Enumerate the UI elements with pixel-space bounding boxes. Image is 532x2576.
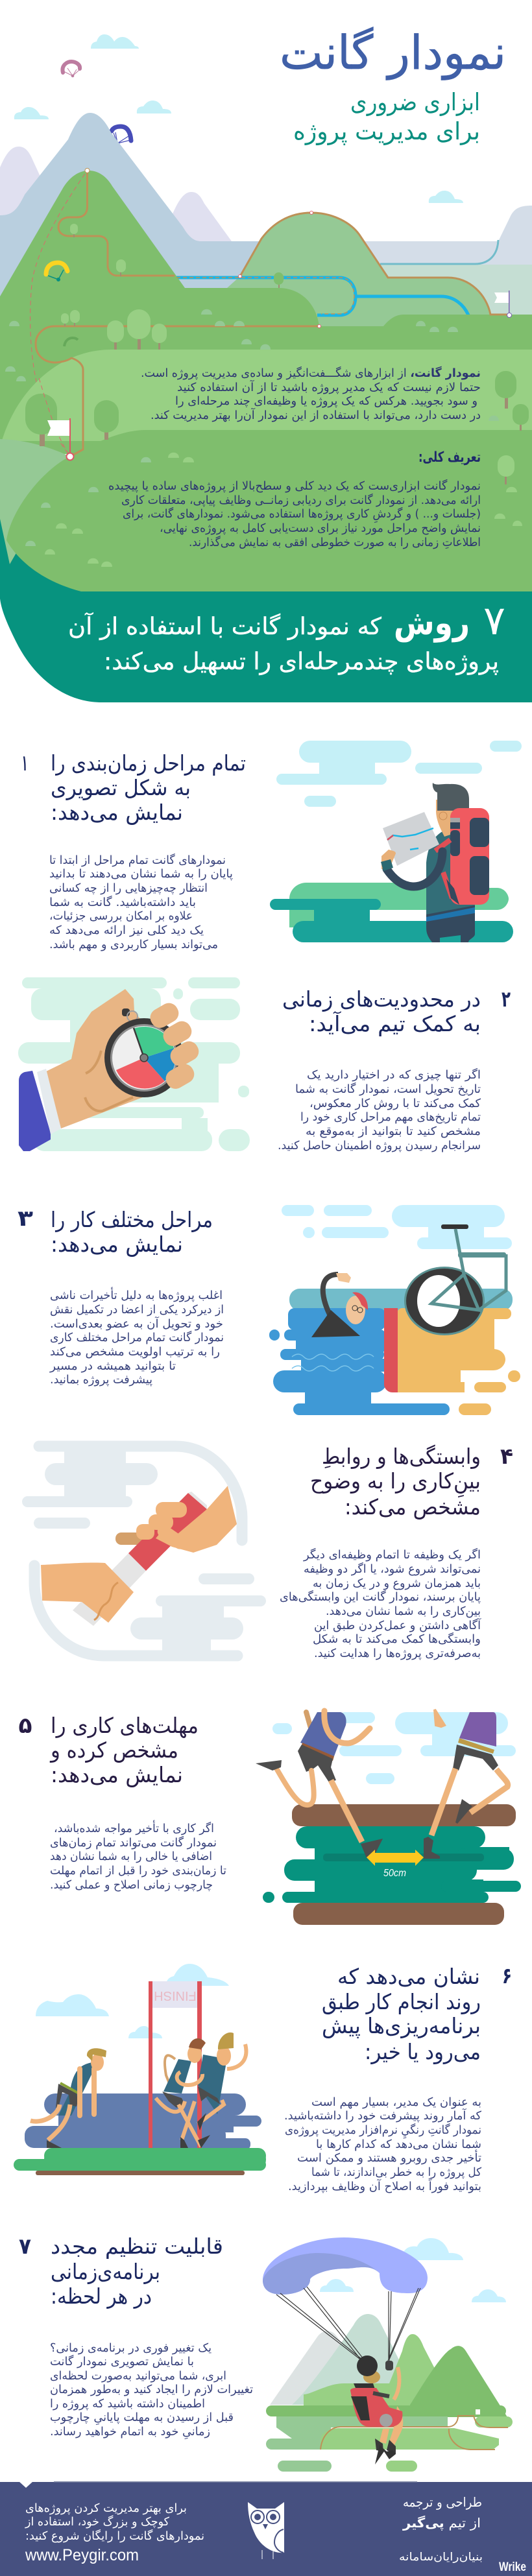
section 4 heading: بینِ‌کاری را به وضوح xyxy=(310,1468,481,1498)
section 1 body: می‌تواند بسیار کاربردی و مهم باشد. xyxy=(49,938,218,951)
icon: parachute yellow xyxy=(46,263,67,281)
runner tired xyxy=(30,2048,106,2148)
runners at finish xyxy=(156,2033,246,2148)
section 3 body: نمودار گانت تمام مراحل مختلف کاری xyxy=(50,1330,224,1344)
subtitle: ابزاری ضروری xyxy=(350,88,480,116)
hero landscape illustration xyxy=(0,34,532,454)
section 1 illustration: man with map xyxy=(270,741,522,942)
call to action text: نمودارهای گانت را رایگان شروع کنید: xyxy=(25,2529,204,2543)
section 2 body: سرانجام رسیدن پروژه اطمینان حاصل کنید. xyxy=(278,1139,481,1152)
section 2 body: اگر تنها چیزی که در اختیار دارید یک xyxy=(307,1067,481,1082)
section 4 body: آگاهی داشتن و عمل‌کردن طبق این xyxy=(314,1617,481,1632)
text block: definition: اطلاعاتِ زمانی را به صورت خطوطی افقی به نمایش می‌گذارند. xyxy=(189,535,481,549)
section 6 heading: روند انجام کار طبق xyxy=(322,1989,481,2015)
section 5 body xyxy=(50,1820,226,1892)
title: نمودار گانت xyxy=(280,25,506,80)
section 7 body: قبل از رسیدن به مهلت پایانیِ چارچوب xyxy=(50,2411,234,2426)
panel: light green intro xyxy=(0,350,532,447)
icon: crescent green xyxy=(64,338,78,346)
clouds xyxy=(276,741,522,807)
small mounds upper xyxy=(5,309,458,387)
text block: definition: ارائه می‌دهد. از نمودار گانت برای ردیابی زمانــی وظایف پیاپی، متعلقات کاری xyxy=(121,493,481,507)
runner blue xyxy=(256,1711,383,1858)
lower hand xyxy=(41,1562,134,1623)
section 6 number: ۶ xyxy=(502,1963,512,1989)
finish gate: FINISH xyxy=(154,1988,197,2003)
section 6 heading: نشان می‌دهد که xyxy=(337,1964,480,1989)
credit text: بنیان‌رایان‌سامانه xyxy=(399,2551,483,2564)
section 2 heading: به کمک تیم می‌آید: xyxy=(309,1011,481,1036)
section 6 body: شما نشان می‌دهد که کدام کارها با xyxy=(316,2138,481,2151)
call to action text xyxy=(25,2501,204,2564)
icon: parachute blue xyxy=(112,126,131,146)
section 1 heading: نمایش می‌دهد: xyxy=(51,800,183,825)
mountains xyxy=(266,2314,513,2472)
ground xyxy=(14,2093,266,2175)
section 6 body: نمودار گانتِ رنگيِ نرم‌افزار مدیریت پروژه‌ی xyxy=(285,2123,481,2139)
footer panel xyxy=(0,2481,532,2576)
heading: seven ways: که نمودار گانت با استفاده از آن xyxy=(68,612,382,640)
section 4 number: ۴ xyxy=(500,1444,513,1470)
icon: parachute pink xyxy=(62,62,80,77)
baton xyxy=(73,1553,146,1626)
section 6 body: کل پروژه را به خطر بی‌اندازند، تا شما xyxy=(311,2165,481,2179)
heading: seven ways xyxy=(68,597,505,675)
section 1 heading: به شکل تصویری xyxy=(51,775,191,800)
text block: intro xyxy=(141,366,481,422)
track xyxy=(263,1804,521,1925)
section 4 body xyxy=(280,1547,481,1660)
section 1 heading xyxy=(51,750,246,825)
sleeve xyxy=(19,1071,51,1151)
credit text: طراحی و ترجمه xyxy=(403,2494,482,2510)
big green mountain xyxy=(0,171,532,454)
section 2 body: کمک می‌کند تا با روش کار معکوس، xyxy=(309,1097,481,1110)
section 2 body: مشخص کنید تا بتوانید از به‌موقع به xyxy=(306,1125,481,1138)
person xyxy=(381,783,489,942)
section 1 body: نمودارهای گانت تمام مراحل از ابتدا تا xyxy=(49,853,226,867)
section 5 number: ۵ xyxy=(18,1713,32,1739)
section 7 heading: برنامه‌ی‌زمانی xyxy=(51,2259,160,2284)
credit text: از تیم پی‌گیر xyxy=(402,2515,481,2531)
panel: definition green xyxy=(6,430,532,591)
section 6 heading xyxy=(322,1964,481,2064)
section 3 heading: نمایش می‌دهد: xyxy=(51,1232,183,1257)
runner purple xyxy=(424,1710,508,1859)
section 5 heading: مهلت‌های کاری را xyxy=(51,1713,199,1738)
clouds xyxy=(320,2238,506,2302)
yellow arrow 50cm xyxy=(367,1850,424,1879)
section 1 body: باید داشته‌باشید. گانت به شما xyxy=(49,895,196,909)
section 2 heading xyxy=(282,986,481,1036)
text: ۱ xyxy=(22,750,27,776)
clouds xyxy=(272,1712,516,1784)
section 6 body: به عنوان یک مدیر، بسیار مهم است xyxy=(311,2095,481,2109)
section 1 body: انتظار چه‌چیزهایی را از چه کسانی xyxy=(49,881,208,895)
icon: flag white right xyxy=(494,291,511,318)
section 3 heading: مراحل مختلف کار را xyxy=(51,1207,213,1232)
section 6 body: که آمار روند پیشرفت خود را داشته‌باشید. xyxy=(284,2108,481,2123)
fingers xyxy=(147,1000,202,1092)
section 3 heading xyxy=(51,1207,213,1257)
swimmer xyxy=(311,1273,368,1337)
stopwatch xyxy=(104,1008,184,1097)
section 5 body: نمودار گانت می‌تواند تمام زمان‌های xyxy=(50,1835,217,1850)
pool xyxy=(269,1289,520,1415)
section 6 heading: برنامه‌ریزی‌ها پیش xyxy=(322,2013,481,2038)
section 3 illustration: swimmer and bicycle xyxy=(269,1205,520,1415)
clouds xyxy=(36,1964,229,2038)
text block: intro: و سود بجویید. هرکس که یک پروژه یا وظیفه‌ای چند مرحله‌ای را xyxy=(175,394,478,408)
heading: definition: تعریف کلی: xyxy=(418,449,481,466)
section 4 body: بین‌کاری را به شما نشان می‌دهد. xyxy=(326,1604,481,1618)
section 7 body xyxy=(50,2341,253,2440)
text block: intro: نمودار گانت، از ابزارهای شگـــفت‌انگیز و ساده‌ی مدیریت پروژه است. xyxy=(141,366,481,380)
section 4 body: به‌صرفه‌تری پروژه‌ها را هدایت کنید. xyxy=(314,1647,481,1660)
clouds xyxy=(22,1446,266,1656)
section 6 illustration: finish line runners xyxy=(14,1964,266,2175)
section 4 body: اگر یک وظیفه تا اتمام وظیفه‌ای دیگر xyxy=(303,1547,481,1562)
text block: definition xyxy=(108,479,481,549)
upper hand xyxy=(156,1486,237,1553)
section 6 body xyxy=(284,2095,481,2193)
section 5 heading: مشخص کرده و xyxy=(49,1737,178,1763)
heading: seven ways: ۷ xyxy=(483,597,505,644)
text block: intro: در دست دارد، می‌تواند با استفاده از این نمودار آن‌را بهتر مدیریت کند. xyxy=(151,407,481,422)
section 1 heading: تمام مراحل زمان‌بندی را xyxy=(51,750,246,776)
triangle notch xyxy=(19,2481,33,2488)
section 1 body xyxy=(49,853,233,951)
section 7 body: اطمینان داشته باشید که پروژه را xyxy=(50,2397,205,2411)
section 4 heading: مشخص می‌کند: xyxy=(345,1494,481,1520)
section 1 body: علاوه بر امکان بررسی جزئیات، xyxy=(49,909,193,923)
red dashed path xyxy=(30,174,85,454)
section 4 body: وابستگی‌ها کمک می‌کند تا به شکل xyxy=(313,1632,481,1646)
section 5 body: تا زمان‌بندی خود را قبل از اتمام مهلت xyxy=(50,1864,226,1878)
section 7 heading xyxy=(51,2234,223,2309)
path nodes xyxy=(85,169,320,328)
call to action text: برای بهتر مدیریت کردن پروژه‌های xyxy=(25,2501,187,2515)
section 6 heading: می‌رود یا خیر: xyxy=(365,2039,481,2064)
canopy xyxy=(263,2237,428,2361)
section 5 heading xyxy=(49,1713,199,1787)
section 1 body: پایان را به شما نشان می‌دهند تا بدانید xyxy=(49,867,233,881)
section 1 body: یک دید کلی نیز ارائه می‌دهد که xyxy=(49,924,204,937)
hill medium green xyxy=(175,213,519,337)
section 3 body: از دیرکرد یکی از اعضا در تکمیل نقش xyxy=(50,1303,224,1317)
river xyxy=(176,278,468,315)
section 2 number: ۲ xyxy=(502,986,511,1012)
section 7 heading: قابلیت تنظیم مجدد xyxy=(51,2234,223,2259)
section 3 number: ۳ xyxy=(18,1206,33,1232)
section 7 body: یک تغییر فوری در برنامه‌ی زمانی؟ xyxy=(50,2341,212,2355)
text block: intro: حتما لازم نیست که یک مدیر پروژه باشید تا از آن استفاده کنید xyxy=(177,379,481,394)
subtitle xyxy=(293,88,480,145)
section 7 illustration: paraglider xyxy=(263,2237,513,2472)
section 7 body: ابری، شما می‌توانید به‌صورت لحظه‌ای xyxy=(50,2369,226,2383)
section 7 heading: در هر لحظه: xyxy=(51,2284,152,2309)
section 6 body: بتوانید فوراً به اصلاح آن وظایف بپردازید. xyxy=(288,2178,481,2193)
pilot xyxy=(350,2355,403,2464)
section 5 body: اگر کاری با تأخیر مواجه شده‌باشد، xyxy=(54,1820,214,1835)
clouds xyxy=(18,977,250,1151)
section 3 body: تا بتوانید همیشه در مسیر xyxy=(49,1359,176,1373)
section 6 body: تأخیر جدی روبرو هستند و ممکن است xyxy=(297,2149,481,2165)
section 3 body: پیشرفت پروژه بمانید. xyxy=(50,1373,152,1387)
section 4 body: باید همزمان شروع و در یک زمان به xyxy=(313,1577,481,1590)
panel: wedge left xyxy=(0,439,71,564)
section 3 body: را به ترتیب اولویت مشخص می‌کند xyxy=(50,1345,220,1359)
icon: clouds xyxy=(14,34,463,203)
teal band background xyxy=(0,506,532,702)
call to action text: کوچک و بزرگ خود، استفاده از xyxy=(25,2515,169,2529)
section 2 body: تمام تاریخ‌های مهم مراحل کاری خود را xyxy=(300,1110,481,1124)
section 5 body: چارچوب زمانی اصلاح و عملی کنید. xyxy=(50,1878,213,1892)
section 7 number: ۷ xyxy=(19,2234,31,2260)
section 5 heading: نمایش می‌دهد: xyxy=(51,1762,183,1787)
section 7 body: زمانیِ خود به اتمام خواهید رساند. xyxy=(50,2425,210,2440)
text block: definition: نمایش واضح مراحل مورد نیاز برای دست‌یابی کامل به پروژه‌ی نهایی، xyxy=(160,521,481,535)
section 7 body: با نمایش تصویری نمودار گانت xyxy=(50,2354,194,2368)
trees on the hill xyxy=(61,224,284,350)
back finger xyxy=(115,1532,156,1545)
section 3 body: اغلب پروژه‌ها به دلیل تأخیرات ناشی xyxy=(50,1287,223,1302)
section 2 body xyxy=(278,1067,481,1152)
ground xyxy=(270,883,513,942)
subtitle: برای مدیریت پروژه xyxy=(293,117,480,145)
section 4 body: پایان برسند، نمودار گانت این وابستگی‌های xyxy=(280,1590,481,1604)
background mountains xyxy=(0,113,532,318)
icon: owl xyxy=(248,2502,284,2559)
section 3 body xyxy=(49,1287,224,1387)
section 2 heading: در محدودیت‌های زمانی xyxy=(282,986,481,1012)
credit text: Wrike xyxy=(499,2560,526,2574)
heading: seven ways: پروژه‌های چندمرحله‌ای را تسهیل می‌کند: xyxy=(104,649,499,675)
text block: definition: (جلسات و... ) و گردشِ کاری پروژه‌ها استفاده می‌شود. نمودارهای گانت، برای xyxy=(123,507,481,523)
heading: seven ways: روش xyxy=(394,604,470,643)
credit text xyxy=(399,2494,526,2574)
section 4 heading xyxy=(310,1444,481,1520)
section 2 body: تاریخ تحویل است، نمودار گانت به شما xyxy=(295,1082,481,1096)
panel decorations: trees, flag and mounds xyxy=(25,358,529,567)
section 3 body: خود و تحویل آن به عضو بعدی‌است. xyxy=(50,1316,223,1331)
clouds xyxy=(282,1205,512,1249)
section 4 heading: وابستگی‌ها و روابطِ xyxy=(322,1444,481,1469)
section 2 illustration: stopwatch in hand xyxy=(18,977,250,1151)
call to action text: www.Peygir.com xyxy=(25,2546,139,2564)
brown paths xyxy=(36,171,509,363)
text block: definition: نمودار گانت ابزاری‌ست که یک دید کلی و سطح‌بالا از پروژه‌های ساده یا پیچیده xyxy=(108,479,481,493)
section 4 illustration: relay baton xyxy=(22,1446,266,1656)
finish gate xyxy=(149,1981,202,2148)
section 7 body: تغییرات لازم را ایجاد کنید و به‌طور همزمان xyxy=(50,2383,253,2396)
section 5 body: اضافی یا خالی را به شما نشان دهد xyxy=(50,1850,212,1863)
hand xyxy=(46,989,156,1128)
section 5 illustration: long jump xyxy=(256,1710,521,1925)
bicycle xyxy=(404,1224,506,1335)
section 4 body: نمی‌تواند شروع شود، یا اگر دو وظیفه xyxy=(304,1562,481,1576)
yellow arrow 50cm: 50cm xyxy=(383,1868,406,1879)
